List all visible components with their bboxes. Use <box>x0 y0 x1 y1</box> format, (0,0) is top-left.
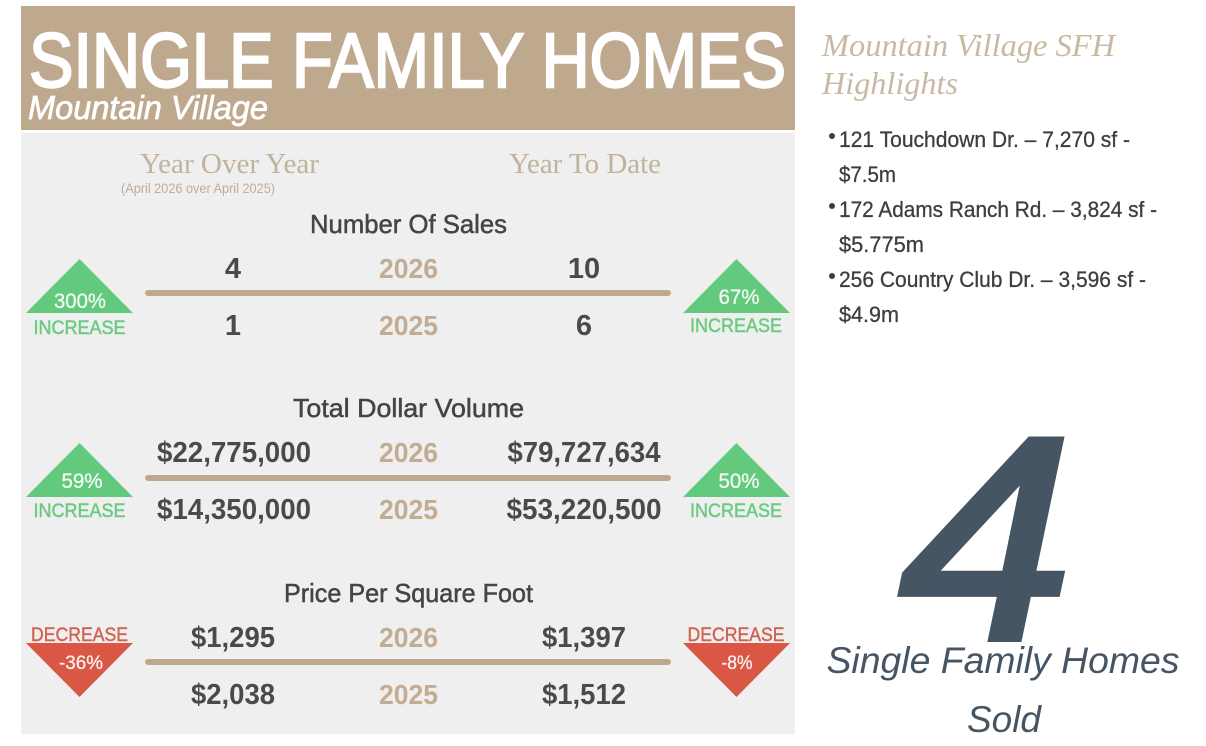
values 2026: 2026 <box>379 253 438 284</box>
bullet: 172 Adams Ranch Rd.: 172 Adams Ranch Rd. – 3,824 sf - <box>839 197 1157 222</box>
bullet: 256 Country Club Dr.: 256 Country Club Dr. – 3,596 sf - <box>839 267 1146 292</box>
icon: up triangle year over year <box>26 259 133 313</box>
values 2025: 1 <box>225 310 241 342</box>
percent change year to date: 67% <box>718 286 760 309</box>
icon: down triangle year to date <box>683 643 790 697</box>
section: price per square foot <box>26 578 790 711</box>
values 2026 <box>225 253 600 285</box>
icon: down triangle year over year <box>26 643 133 697</box>
section: number of sales <box>26 209 790 342</box>
subtitle: Mountain Village <box>28 89 268 126</box>
values 2025: 2025 <box>379 310 438 341</box>
big number: homes sold: 4 <box>899 377 1073 701</box>
values 2025 <box>191 679 626 711</box>
icon: up triangle year to date <box>683 259 790 313</box>
values 2026: 2026 <box>379 437 438 468</box>
label: increase: INCREASE <box>34 318 126 339</box>
header banner <box>21 6 795 130</box>
icon: up triangle year to date <box>683 443 790 497</box>
panel: statistics <box>21 133 795 734</box>
note: comparison period: (April 2026 over April 2025) <box>121 180 275 196</box>
title: SINGLE FAMILY HOMES <box>29 18 786 104</box>
percent change year to date: -8% <box>722 653 753 674</box>
divider line <box>145 475 671 481</box>
label: decrease: DECREASE <box>31 625 128 646</box>
bullet: 256 Country Club Dr.: $4.9m <box>839 302 899 327</box>
values 2026: $79,727,634 <box>508 437 660 469</box>
bullet: 121 Touchdown Dr.: $7.5m <box>839 162 896 187</box>
label: increase: INCREASE <box>34 501 126 522</box>
bullet: 172 Adams Ranch Rd. <box>829 197 1157 257</box>
caption: homes sold: Single Family Homes <box>826 640 1180 681</box>
section heading: Number Of Sales <box>310 209 507 239</box>
values 2025: 6 <box>576 310 592 342</box>
section heading: Price Per Square Foot <box>284 578 534 608</box>
caption: homes sold <box>826 640 1180 740</box>
divider line <box>145 659 671 665</box>
percent change year over year: 300% <box>54 290 106 313</box>
label: decrease: DECREASE <box>688 625 784 646</box>
bullet: 121 Touchdown Dr. <box>829 127 1130 187</box>
values 2025: $2,038 <box>191 679 275 711</box>
values 2026: $22,775,000 <box>157 437 311 469</box>
label: increase: INCREASE <box>690 501 782 522</box>
highlights heading: Highlights <box>821 65 958 101</box>
values 2025: $1,512 <box>542 679 626 711</box>
highlights heading: Mountain Village SFH <box>821 27 1117 63</box>
icon: up triangle year over year <box>26 443 133 497</box>
caption: homes sold: Sold <box>967 699 1042 740</box>
percent change year to date: 50% <box>718 470 760 493</box>
heading: year to date: Year To Date <box>509 149 661 180</box>
values 2026: 4 <box>225 253 241 285</box>
percent change year over year: 59% <box>62 470 102 493</box>
values 2025: 2025 <box>379 679 438 710</box>
values 2025: 2025 <box>379 494 438 525</box>
values 2026: 2026 <box>379 622 438 653</box>
bullet: 172 Adams Ranch Rd.: $5.775m <box>839 232 924 257</box>
heading: year over year: Year Over Year <box>140 149 320 180</box>
highlights list <box>829 127 1157 327</box>
percent change year over year: -36% <box>59 653 103 674</box>
divider line <box>145 290 671 296</box>
values 2025: $53,220,500 <box>506 494 662 526</box>
values 2026 <box>157 437 660 469</box>
values 2026: $1,295 <box>191 622 275 654</box>
values 2026: $1,397 <box>542 622 626 654</box>
values 2026: 10 <box>568 253 600 285</box>
values 2025: $14,350,000 <box>157 494 311 526</box>
section heading: Total Dollar Volume <box>293 393 524 423</box>
section: total dollar volume <box>26 393 790 526</box>
values 2026 <box>191 622 626 654</box>
highlights heading <box>821 27 1117 101</box>
label: increase: INCREASE <box>690 316 782 337</box>
values 2025 <box>157 494 662 526</box>
bullet: 256 Country Club Dr. <box>829 267 1146 327</box>
bullet: 121 Touchdown Dr.: 121 Touchdown Dr. – 7,270 sf - <box>839 127 1130 152</box>
values 2025 <box>225 310 592 342</box>
